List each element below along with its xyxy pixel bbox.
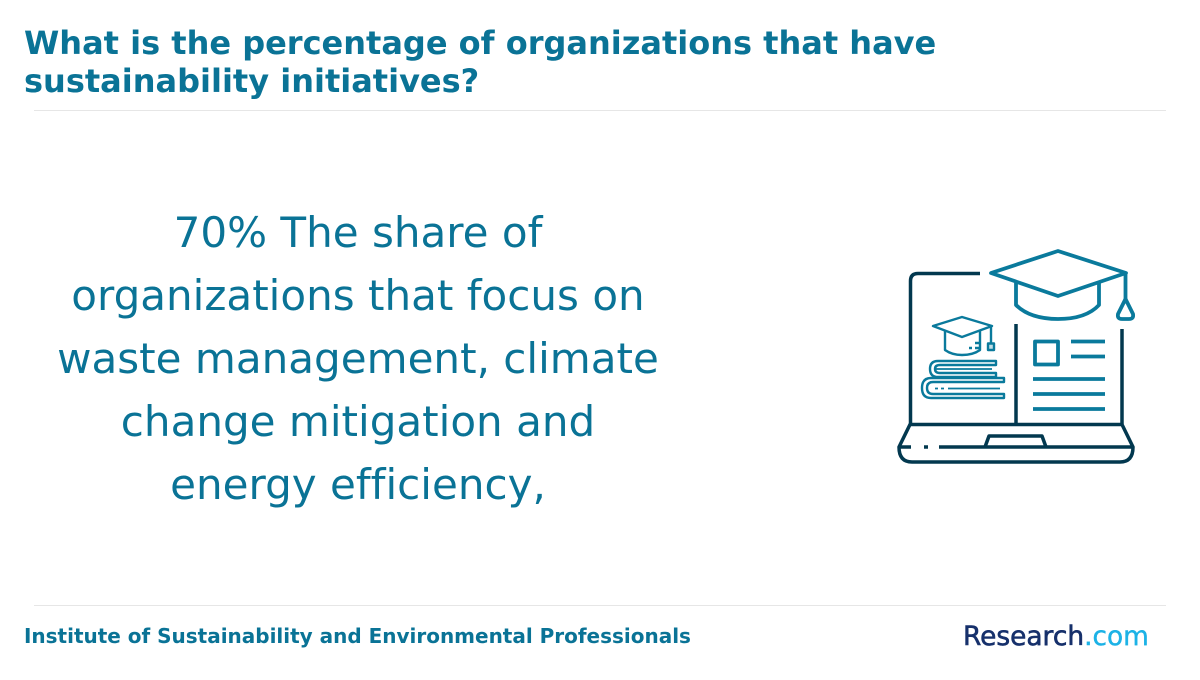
main statistic text: waste management, climate [57, 334, 659, 383]
icon: laptop with graduation cap and books [897, 249, 1136, 464]
logo: Research.com [963, 621, 1149, 652]
large graduation cap [991, 251, 1133, 319]
source text: Institute of Sustainability and Environmental Professionals [24, 624, 691, 648]
main statistic text: change mitigation and [121, 397, 595, 446]
title [24, 24, 936, 100]
title: What is the percentage of organizations that have [24, 24, 936, 62]
laptop body [899, 274, 1133, 462]
main statistic text: organizations that focus on [71, 271, 645, 320]
small cap and books [922, 317, 1004, 398]
main statistic text [57, 208, 659, 509]
title: sustainability initiatives? [24, 62, 479, 100]
main statistic text: 70% The share of [174, 208, 542, 257]
page content lines [1033, 342, 1105, 409]
main statistic text: energy efficiency, [170, 460, 546, 509]
